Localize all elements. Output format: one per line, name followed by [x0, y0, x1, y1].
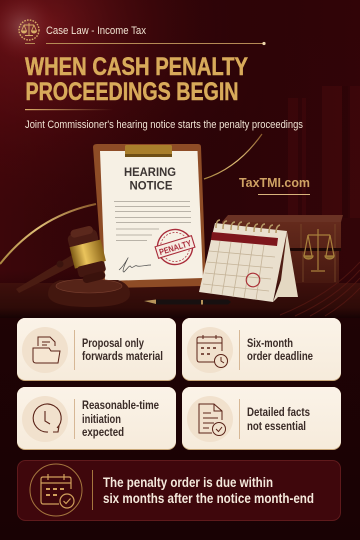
- notice text lines: [114, 202, 191, 240]
- calendar circled date: [246, 273, 260, 287]
- penalty stamp: PENALTY: [158, 238, 193, 257]
- clipboard: hearing notice: [93, 144, 206, 288]
- header rule: [25, 42, 266, 45]
- header: scales logo and category: [19, 20, 266, 45]
- gold sweeping arc: [0, 134, 262, 264]
- card text: [247, 338, 313, 363]
- category label: Case Law - Income Tax: [46, 25, 146, 37]
- signature: [119, 258, 151, 272]
- card: proposal only forwards material: [17, 318, 176, 381]
- gavel head: [66, 224, 110, 285]
- gavel: [16, 224, 130, 307]
- notice heading: HEARING: [124, 167, 176, 179]
- clipboard clip: [125, 145, 172, 157]
- card: six-month order deadline: [182, 318, 341, 381]
- card text: [82, 400, 159, 439]
- penalty stamp: [152, 225, 198, 269]
- calendar rings: [216, 220, 280, 233]
- card text: expected: [82, 427, 124, 439]
- card text: not essential: [247, 421, 306, 433]
- card text: order deadline: [247, 351, 313, 363]
- gavel handle: [16, 255, 76, 293]
- icon: calendar with check: [30, 464, 82, 516]
- calendar red band: [211, 232, 278, 246]
- table surface: [0, 262, 360, 318]
- icon: clock: [22, 396, 68, 442]
- card text: Reasonable-time: [82, 400, 159, 412]
- card text: Proposal only: [82, 338, 144, 350]
- card text: Detailed facts: [247, 407, 310, 419]
- takeaway text: six months after the notice month-end: [103, 491, 314, 506]
- icon: document with check: [187, 396, 233, 442]
- takeaway panel: [18, 460, 340, 520]
- card: reasonable-time initiation expected: [17, 387, 176, 450]
- card text: [247, 407, 310, 433]
- takeaway text: [103, 475, 314, 506]
- brand: TaxTMI.com: TaxTMI.com: [239, 175, 310, 190]
- card text: initiation: [82, 414, 121, 426]
- icon: gold scales on book: [304, 229, 334, 271]
- title: PROCEEDINGS BEGIN: [26, 78, 238, 106]
- card text: forwards material: [82, 351, 163, 363]
- card: detailed facts not essential: [182, 387, 341, 450]
- subtitle: Joint Commissioner's hearing notice starts the penalty proceedings: [25, 119, 303, 131]
- card text: Six-month: [247, 338, 293, 350]
- gavel base: [48, 280, 130, 307]
- pen: [144, 300, 231, 304]
- background pillars: [288, 86, 360, 218]
- icon: folder: [22, 327, 68, 373]
- stack of law books: [222, 215, 343, 283]
- notice heading: NOTICE: [130, 180, 173, 192]
- notice heading: [124, 167, 176, 192]
- icon: calendar with clock: [187, 327, 233, 373]
- title underline: [25, 109, 113, 110]
- card text: [82, 338, 163, 363]
- takeaway text: The penalty order is due within: [103, 475, 273, 490]
- desk calendar: [199, 220, 298, 302]
- icon: scales logo: [19, 20, 39, 40]
- calendar grid: [203, 241, 275, 300]
- title: [25, 53, 248, 106]
- title: WHEN CASH PENALTY: [25, 53, 248, 81]
